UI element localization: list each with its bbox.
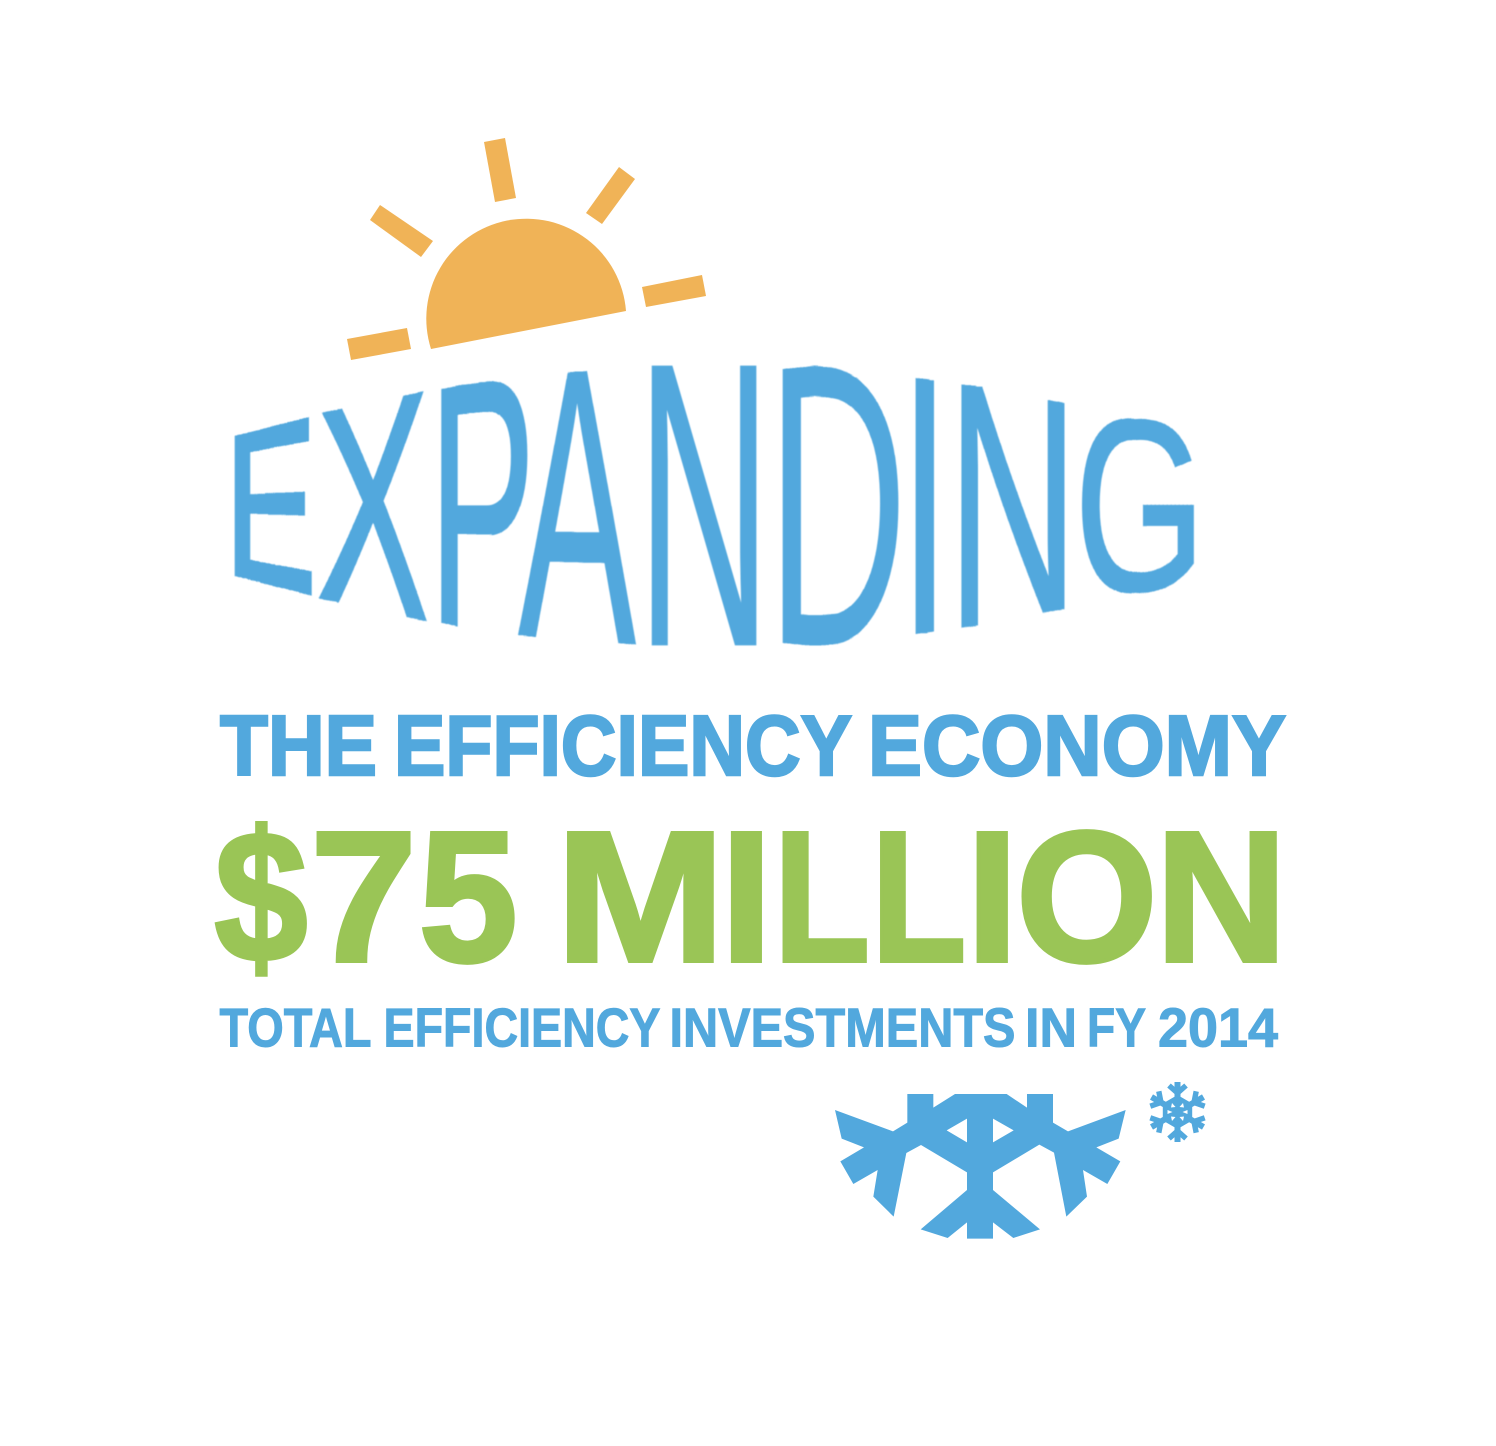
title: EXPANDING warped word: X	[317, 283, 428, 728]
heading: the efficiency economy	[220, 699, 1286, 794]
big number: $75 million: 7	[310, 794, 417, 1001]
subheading: total efficiency investments: 2014	[1158, 996, 1278, 1058]
title: EXPANDING warped word: N	[947, 282, 1079, 731]
subheading: total efficiency investments: EFFICIENCY	[384, 996, 660, 1058]
title: EXPANDING warped word	[200, 278, 1220, 733]
heading: the efficiency economy: THE	[220, 699, 377, 794]
big number: $75 million: L	[871, 794, 966, 1001]
big number: $75 million	[214, 794, 1287, 1001]
big number: $75 million: I	[720, 794, 772, 1001]
icon: large cropped snowflake	[835, 1094, 1126, 1239]
big number: $75 million: L	[774, 794, 870, 1001]
subheading: total efficiency investments: TOTAL	[220, 996, 372, 1058]
subheading: total efficiency investments: FY	[1087, 996, 1146, 1058]
big number: $75 million: I	[966, 794, 1018, 1001]
title: EXPANDING warped word: E	[225, 284, 316, 726]
title: EXPANDING warped word: D	[767, 278, 908, 733]
icon: rising sun	[347, 138, 706, 360]
title: EXPANDING warped word: P	[429, 281, 535, 729]
title: EXPANDING warped word: I	[899, 279, 951, 731]
heading: the efficiency economy: EFFICIENCY	[394, 699, 852, 794]
title: EXPANDING warped word: A	[518, 281, 637, 732]
big number: $75 million: N	[1156, 794, 1287, 1001]
big number: $75 million: M	[556, 794, 725, 1001]
big number: $75 million: O	[1016, 794, 1158, 1001]
subheading: total efficiency investments: IN	[1025, 996, 1077, 1058]
subheading: total efficiency investments	[220, 996, 1278, 1058]
subheading: total efficiency investments: INVESTMENTS	[670, 996, 1016, 1058]
icon: small snowflake	[1150, 1082, 1205, 1142]
title: EXPANDING warped word: N	[637, 279, 771, 731]
title: EXPANDING warped word: G	[1074, 284, 1206, 727]
big number: $75 million: $	[214, 794, 308, 1001]
heading: the efficiency economy: ECONOMY	[868, 699, 1286, 794]
big number: $75 million: 5	[419, 794, 518, 1001]
